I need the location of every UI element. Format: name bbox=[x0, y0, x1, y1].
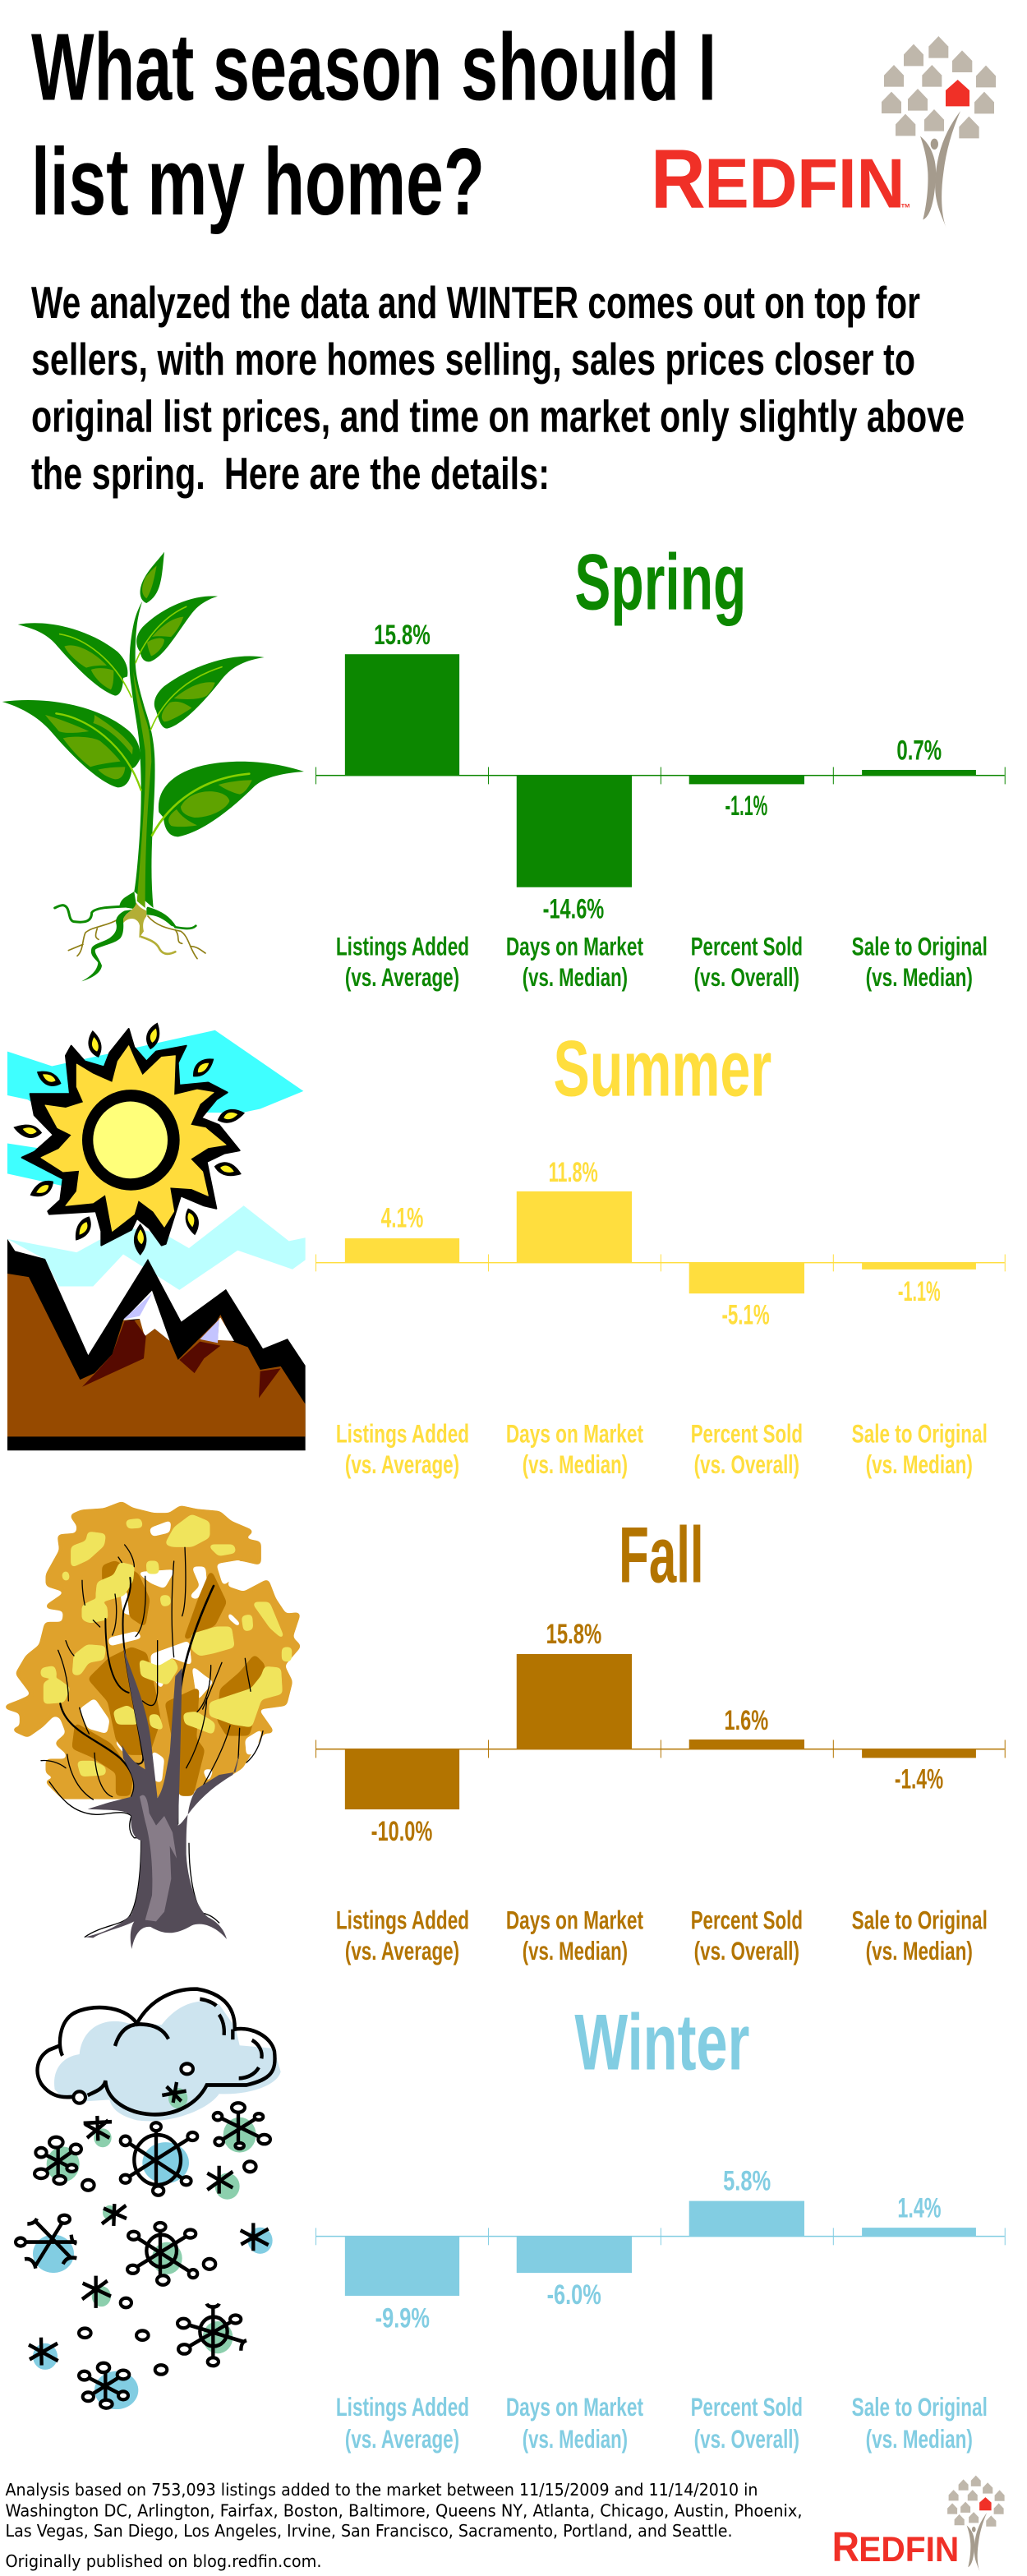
bar chart: winter: -6.0% bbox=[547, 2279, 601, 2311]
bar chart: winter: -9.9% bbox=[375, 2302, 430, 2334]
title: What season should I bbox=[31, 13, 716, 120]
panel: fall bbox=[7, 1504, 1006, 1965]
bar chart: spring: 0.7% bbox=[896, 735, 942, 767]
icon: sun over mountains bbox=[7, 1021, 306, 1450]
bar chart: winter: (vs. Overall) bbox=[694, 2424, 799, 2454]
bar chart: winter: (vs. Average) bbox=[345, 2424, 459, 2454]
footer notes: Originally published on blog.redfin.com. bbox=[5, 2551, 322, 2571]
bar chart: spring: Percent Sold bbox=[691, 931, 803, 961]
bar chart: spring: 15.8% bbox=[374, 620, 431, 651]
bar chart: fall: -1.4% bbox=[895, 1764, 943, 1795]
bar chart: spring: (vs. Average) bbox=[345, 962, 459, 992]
footer notes: Washington DC, Arlington, Fairfax, Boston, Baltimore, Queens NY, Atlanta, Chicago, Austin, Phoenix, bbox=[5, 2501, 802, 2521]
bar chart: summer: 11.8% bbox=[549, 1157, 598, 1188]
bar chart: summer: (vs. Average) bbox=[345, 1449, 459, 1479]
bar chart: summer: Days on Market bbox=[506, 1418, 643, 1448]
icon: Redfin footer logo: R bbox=[832, 2523, 859, 2570]
footer notes: Las Vegas, San Diego, Los Angeles, Irvine, San Francisco, Sacramento, Portland, and Seattle. bbox=[5, 2521, 733, 2541]
bar chart: winter: Days on Market bbox=[506, 2392, 643, 2422]
heading: Spring: Spring bbox=[574, 538, 746, 626]
bar chart: fall: Days on Market bbox=[506, 1905, 643, 1934]
bar chart: summer: 4.1% bbox=[381, 1203, 423, 1234]
bar chart: summer: (vs. Median) bbox=[866, 1449, 973, 1479]
bar chart: summer: (vs. Median) bbox=[523, 1449, 628, 1479]
icon: plant bbox=[2, 552, 304, 981]
intro paragraph: the spring. Here are the details: bbox=[31, 448, 550, 499]
icon: Redfin footer logo: EDFIN bbox=[859, 2530, 959, 2569]
panel: summer bbox=[7, 1021, 1006, 1479]
icon: autumn tree bbox=[7, 1504, 298, 1949]
bar chart: winter: (vs. Median) bbox=[866, 2424, 973, 2454]
icon: snow cloud bbox=[16, 1989, 281, 2427]
icon: Redfin logo: EDFIN bbox=[704, 145, 905, 223]
bar chart: fall: -10.0% bbox=[371, 1816, 432, 1847]
bar chart: summer: Listings Added bbox=[336, 1418, 469, 1448]
bar chart: spring: (vs. Median) bbox=[866, 962, 973, 992]
bar chart: spring: (vs. Overall) bbox=[694, 962, 799, 992]
bar chart: fall: Listings Added bbox=[336, 1905, 469, 1934]
footer notes: Analysis based on 753,093 listings added to the market between 11/15/2009 and 11/14/2010 in bbox=[5, 2480, 758, 2500]
bar chart: spring: (vs. Median) bbox=[523, 962, 628, 992]
bar chart: summer: Percent Sold bbox=[691, 1418, 803, 1448]
bar chart: summer: -5.1% bbox=[721, 1300, 770, 1331]
bar chart: spring: -14.6% bbox=[543, 894, 604, 925]
bar chart: fall: (vs. Overall) bbox=[694, 1936, 799, 1965]
title bbox=[31, 13, 716, 235]
bar chart: fall: 1.6% bbox=[724, 1705, 768, 1736]
bar chart: fall: Percent Sold bbox=[691, 1905, 803, 1934]
intro paragraph bbox=[31, 277, 965, 499]
heading: Summer: Summer bbox=[554, 1025, 771, 1113]
bar chart: summer bbox=[315, 1157, 1006, 1479]
bar chart: fall: (vs. Median) bbox=[523, 1936, 628, 1965]
icon: Redfin footer logo bbox=[832, 2476, 1005, 2571]
bar chart: spring bbox=[315, 620, 1006, 992]
panel: spring bbox=[2, 538, 1006, 992]
bar chart: winter: 1.4% bbox=[897, 2192, 942, 2223]
bar chart: summer: -1.1% bbox=[898, 1276, 941, 1307]
bar chart: winter: (vs. Median) bbox=[523, 2424, 628, 2454]
icon: Redfin logo: TM bbox=[901, 204, 910, 210]
bar chart: fall: 15.8% bbox=[546, 1619, 601, 1650]
title: list my home? bbox=[31, 128, 485, 235]
bar chart: winter bbox=[315, 2166, 1006, 2454]
footer notes bbox=[5, 2480, 802, 2571]
bar chart: fall: (vs. Average) bbox=[345, 1936, 459, 1965]
icon: Redfin logo bbox=[651, 36, 996, 228]
bar chart: spring: Days on Market bbox=[506, 931, 643, 961]
bar chart: winter: 5.8% bbox=[723, 2166, 771, 2197]
heading: Winter: Winter bbox=[574, 1998, 749, 2086]
bar chart: spring: -1.1% bbox=[725, 790, 767, 822]
heading: Fall: Fall bbox=[619, 1511, 704, 1599]
bar chart: fall bbox=[315, 1619, 1006, 1965]
bar chart: fall: (vs. Median) bbox=[866, 1936, 973, 1965]
panel: winter bbox=[16, 1989, 1006, 2454]
bar chart: spring: Listings Added bbox=[336, 931, 469, 961]
bar chart: winter: Percent Sold bbox=[691, 2392, 803, 2422]
bar chart: winter: Listings Added bbox=[336, 2392, 469, 2422]
icon: Redfin logo: R bbox=[651, 132, 706, 226]
bar chart: summer: (vs. Overall) bbox=[694, 1449, 799, 1479]
